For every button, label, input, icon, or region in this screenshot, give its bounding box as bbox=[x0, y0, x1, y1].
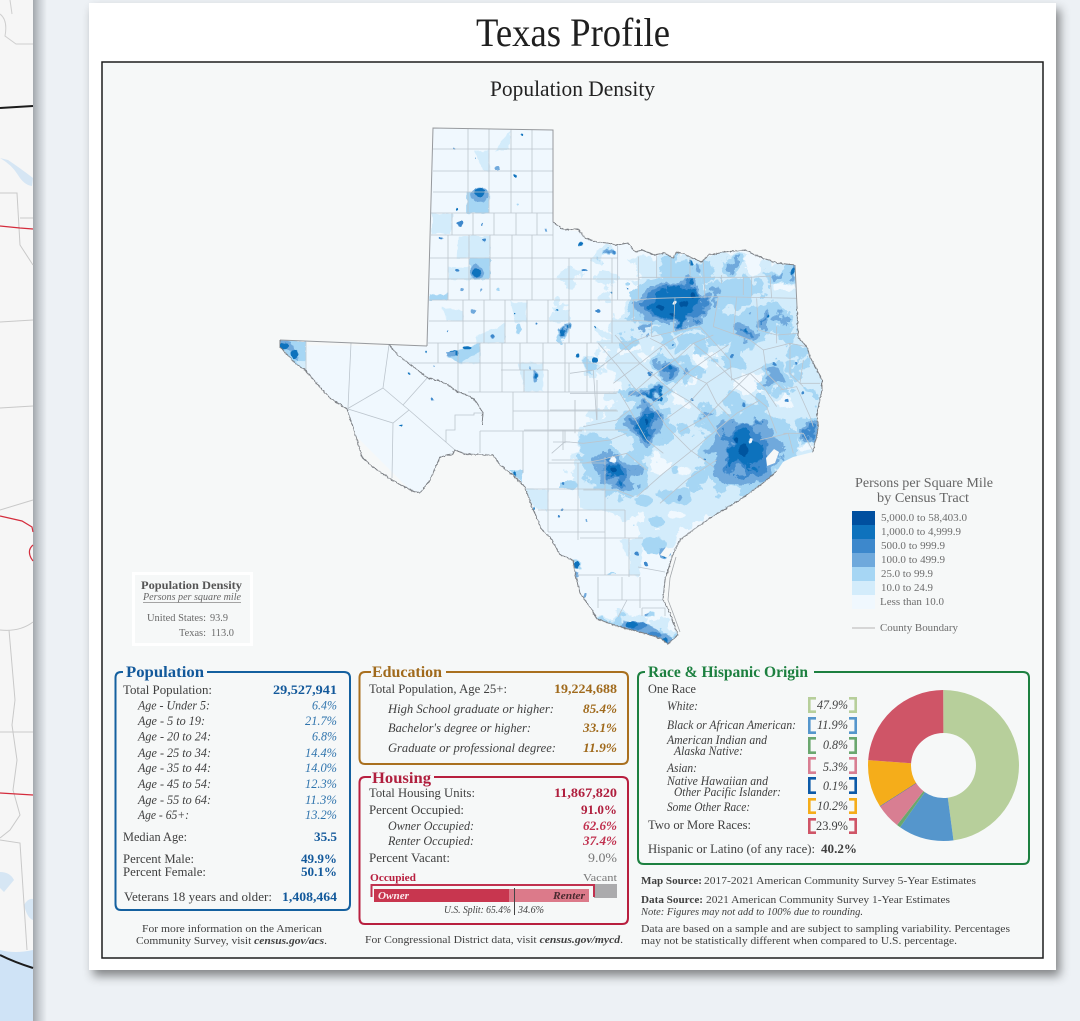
panel: population: Age - 35 to 44: bbox=[137, 761, 211, 775]
panel: population: Median Age: bbox=[123, 830, 187, 844]
panel: race and hispanic origin: One Race bbox=[648, 682, 696, 696]
sources and notes bbox=[640, 876, 1010, 947]
map: Texas population density bbox=[270, 128, 830, 650]
panel: housing: 91.0% bbox=[581, 803, 617, 817]
panel: population: Age - 55 to 64: bbox=[137, 793, 211, 807]
inset: population density comparison: Texas: bbox=[179, 628, 206, 639]
panel: education: 85.4% bbox=[583, 702, 617, 716]
sources and notes: may not be statistically different when compared to U.S. percentage. bbox=[641, 936, 957, 947]
panel: race and hispanic origin: Hispanic or Latino (of any race): bbox=[648, 842, 815, 856]
panel: housing: Housing bbox=[372, 770, 431, 787]
sources and notes: Data are based on a sample and are subject to sampling variability. Percentages bbox=[641, 924, 1010, 935]
sources and notes: 2017-2021 American Community Survey 5-Year Estimates bbox=[704, 876, 976, 887]
panel: population: Percent Female: bbox=[123, 865, 206, 879]
legend: persons per square mile: 500.0 to 999.9 bbox=[881, 541, 945, 552]
panel: housing: Total Housing Units: bbox=[369, 786, 475, 800]
inset: population density comparison: 93.9 bbox=[210, 613, 228, 624]
panel: race and hispanic origin: 0.8% bbox=[823, 738, 848, 752]
housing occupancy bar: Vacant bbox=[583, 873, 617, 884]
note: congressional district link: For Congressional District data, visit census.gov/mycd . bbox=[365, 935, 623, 946]
panel: population: Age - 65+: bbox=[137, 808, 189, 822]
panel: population: 1,408,464 bbox=[282, 890, 338, 904]
panel: race and hispanic origin: 10.2% bbox=[817, 799, 848, 813]
housing occupancy bar: 34.6% bbox=[517, 905, 544, 916]
bays and inlets bbox=[660, 449, 779, 558]
panel: population: 11.3% bbox=[305, 793, 337, 807]
inner framed panel bbox=[102, 62, 1043, 958]
panel: race and hispanic origin: Some Other Race: bbox=[667, 800, 750, 814]
panel: population: 6.4% bbox=[312, 698, 337, 712]
background map sheet at left bbox=[0, 0, 47, 1021]
panel: population: Total Population: bbox=[123, 683, 212, 697]
panel: race and hispanic origin: Native Hawaiian and bbox=[666, 774, 769, 788]
inset: population density comparison: 113.0 bbox=[211, 628, 234, 639]
panel: race and hispanic origin: 5.3% bbox=[823, 760, 848, 774]
panel: race and hispanic origin: 0.1% bbox=[823, 779, 848, 793]
panel: race and hispanic origin bbox=[638, 664, 1029, 864]
bracketed race percentages bbox=[809, 698, 856, 833]
state outline bbox=[280, 128, 822, 644]
legend: persons per square mile: Less than 10.0 bbox=[880, 597, 944, 608]
legend: persons per square mile bbox=[852, 475, 993, 634]
panel: education: Graduate or professional degree: bbox=[388, 741, 556, 755]
sources and notes: Note: Figures may not add to 100% due to rounding. bbox=[640, 907, 863, 918]
panel: race and hispanic origin: 23.9% bbox=[816, 819, 848, 833]
panel: housing: Renter Occupied: bbox=[387, 834, 474, 848]
panel: education: Total Population, Age 25+: bbox=[369, 682, 507, 696]
panel: population: 12.3% bbox=[305, 777, 337, 791]
panel: race and hispanic origin: Asian: bbox=[666, 761, 697, 775]
panel: race and hispanic origin: Black or African American: bbox=[667, 718, 796, 732]
county boundaries bbox=[306, 128, 820, 617]
legend: persons per square mile: by Census Tract bbox=[877, 490, 969, 505]
sources and notes: Map Source: bbox=[641, 876, 702, 887]
panel: population: Population bbox=[126, 664, 204, 681]
panel: population: Veterans 18 years and older: bbox=[124, 890, 272, 904]
legend: persons per square mile: Persons per Square Mile bbox=[855, 475, 993, 490]
inset: population density comparison: Population Density bbox=[141, 580, 242, 592]
panel: population: 50.1% bbox=[301, 865, 337, 879]
panel: housing: 37.4% bbox=[582, 834, 617, 848]
panel: race and hispanic origin: 11.9% bbox=[817, 718, 848, 732]
panel: housing: 9.0% bbox=[588, 851, 617, 865]
panel: race and hispanic origin: 47.9% bbox=[817, 698, 848, 712]
panel: population: Age - Under 5: bbox=[137, 698, 210, 712]
panel: housing: 62.6% bbox=[583, 819, 617, 833]
panel: housing bbox=[360, 770, 628, 924]
map heading: Population Density bbox=[490, 76, 656, 101]
panel: race and hispanic origin: Two or More Races: bbox=[648, 818, 751, 832]
panel: population: 14.4% bbox=[305, 746, 337, 760]
panel: education: 33.1% bbox=[582, 721, 617, 735]
sources and notes: Data Source: bbox=[641, 895, 703, 906]
note: american community survey link bbox=[136, 924, 327, 947]
panel: population: 13.2% bbox=[305, 808, 337, 822]
sources and notes: 2021 American Community Survey 1-Year Estimates bbox=[706, 895, 950, 906]
legend: persons per square mile: 100.0 to 499.9 bbox=[881, 555, 945, 566]
title: Texas Profile bbox=[476, 10, 670, 55]
panel: population: Age - 45 to 54: bbox=[137, 777, 211, 791]
panel: population: 21.7% bbox=[305, 714, 337, 728]
legend: persons per square mile: 10.0 to 24.9 bbox=[881, 583, 933, 594]
panel: education: 19,224,688 bbox=[554, 682, 617, 696]
panel: race and hispanic origin: Other Pacific Islander: bbox=[674, 785, 781, 799]
panel: education: Bachelor's degree or higher: bbox=[388, 721, 531, 735]
legend: persons per square mile: 1,000.0 to 4,999.9 bbox=[881, 527, 961, 538]
panel: population: 49.9% bbox=[301, 852, 337, 866]
panel: education: High School graduate or higher: bbox=[387, 702, 554, 716]
inset: population density comparison: United States: bbox=[147, 613, 206, 624]
panel: housing: Percent Vacant: bbox=[369, 851, 450, 865]
panel: housing: Percent Occupied: bbox=[369, 803, 464, 817]
housing occupancy bar bbox=[370, 873, 617, 916]
note: american community survey link: For more information on the American bbox=[142, 924, 323, 935]
note: american community survey link: Community Survey, visit census.gov/acs . bbox=[136, 936, 327, 947]
panel: education bbox=[360, 664, 628, 764]
panel: population: 29,527,941 bbox=[273, 683, 337, 697]
panel: housing: Owner Occupied: bbox=[388, 819, 474, 833]
panel: population: 14.0% bbox=[305, 761, 337, 775]
housing occupancy bar: Owner bbox=[378, 891, 410, 902]
panel: population bbox=[116, 664, 350, 910]
housing occupancy bar: Occupied bbox=[370, 873, 416, 884]
panel: race and hispanic origin: American Indian and bbox=[666, 733, 768, 747]
panel: population: 35.5 bbox=[314, 830, 337, 844]
panel: education: Education bbox=[372, 664, 442, 681]
housing occupancy bar: U.S. Split: 65.4% bbox=[444, 905, 511, 916]
panel: population: Age - 20 to 24: bbox=[137, 730, 211, 744]
panel: population: Percent Male: bbox=[123, 852, 194, 866]
panel: race and hispanic origin: Alaska Native: bbox=[673, 744, 743, 758]
panel: housing: 11,867,820 bbox=[554, 786, 617, 800]
housing occupancy bar: Renter bbox=[552, 891, 586, 902]
legend: persons per square mile: 5,000.0 to 58,403.0 bbox=[881, 513, 967, 524]
donut chart bbox=[890, 712, 998, 820]
panel: population: Age - 5 to 19: bbox=[137, 714, 205, 728]
panel: race and hispanic origin: Race & Hispanic Origin bbox=[648, 664, 808, 681]
panel: population: 6.8% bbox=[312, 730, 337, 744]
inset: population density comparison: Persons per square mile bbox=[142, 592, 241, 603]
inset: population density comparison bbox=[134, 574, 252, 644]
legend: persons per square mile: 25.0 to 99.9 bbox=[881, 569, 933, 580]
legend: persons per square mile: County Boundary bbox=[880, 623, 959, 634]
panel: race and hispanic origin: White: bbox=[667, 699, 698, 713]
panel: population: Age - 25 to 34: bbox=[137, 746, 211, 760]
panel: race and hispanic origin: 40.2% bbox=[821, 842, 857, 856]
panel: education: 11.9% bbox=[583, 741, 617, 755]
